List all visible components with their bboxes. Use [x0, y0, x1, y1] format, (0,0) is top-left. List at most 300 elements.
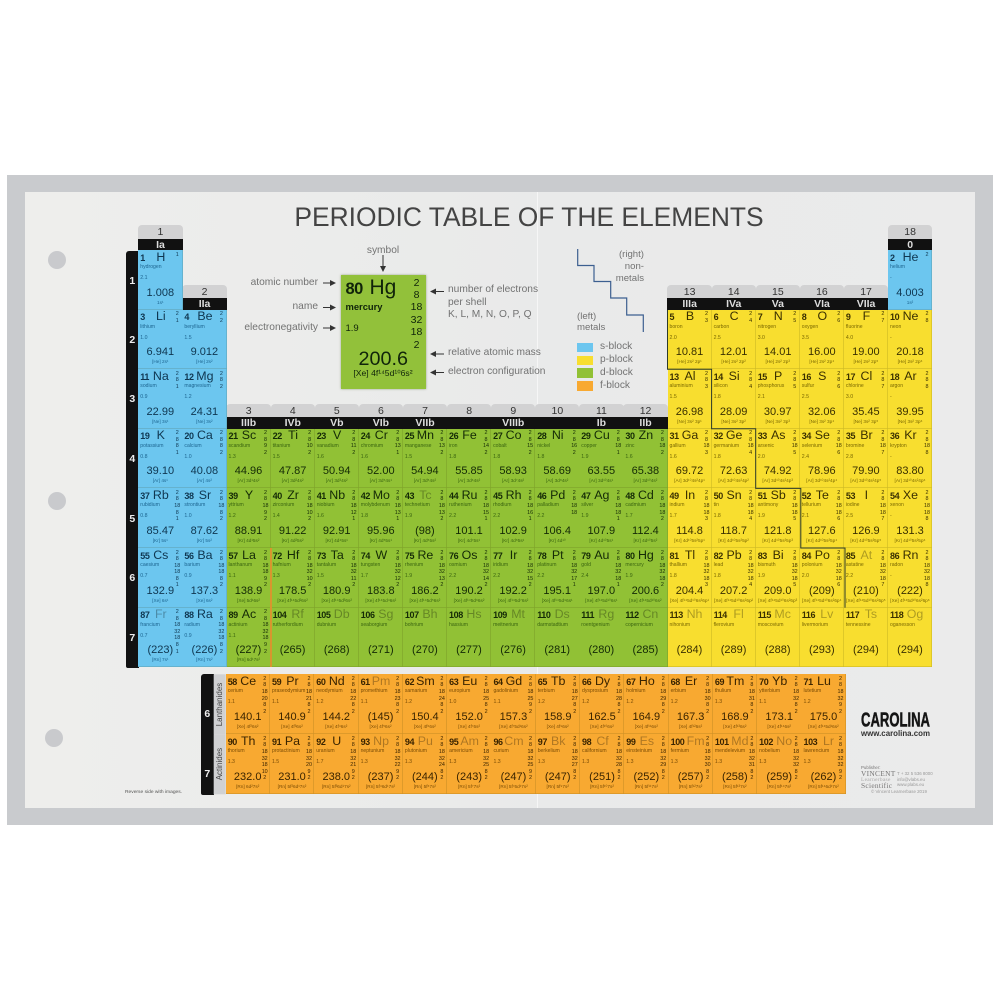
element: Xe: 8	[926, 496, 928, 502]
element: Ar: argon	[890, 383, 903, 389]
element: W: 2	[396, 550, 399, 556]
element: Md: (258)	[722, 771, 748, 783]
element: Be: beryllium	[184, 324, 205, 330]
element: Nd: 1.2	[316, 699, 323, 705]
element: Dy: 66	[582, 677, 591, 687]
element: W	[359, 548, 403, 608]
element: Kr: 8	[926, 450, 928, 456]
element: Th	[226, 734, 270, 794]
element: C	[712, 310, 756, 369]
element: Np: (237)	[368, 771, 393, 783]
label: left metals: (left)	[577, 311, 596, 322]
element: Re: 32	[439, 569, 445, 575]
element: Nb: 1	[352, 516, 355, 522]
element: He: helium	[890, 264, 905, 270]
publisher block: www.plabs.eu	[897, 782, 924, 787]
element: Cd: cadmium	[625, 502, 646, 508]
element: Bi: 1.9	[758, 573, 765, 579]
element: Lu: 8	[839, 682, 842, 688]
element: Am: 32	[483, 756, 489, 762]
element: Lr: (262)	[811, 771, 836, 783]
element: Lu: [Xe] 4f¹⁴5d¹6s²	[808, 724, 839, 729]
element: C: 2.5	[714, 335, 721, 341]
element: Fe: 55.85	[455, 465, 483, 477]
element: Ir: 32	[527, 569, 533, 575]
element: Ni	[535, 429, 580, 488]
element: Ba: 2	[220, 550, 223, 556]
element: Th: 8	[263, 742, 266, 748]
element: Co: 8	[529, 437, 532, 443]
element: Lr: 103	[803, 737, 817, 747]
element: La: 18	[262, 569, 268, 575]
element: Ca: 40.08	[191, 465, 218, 477]
element: Ts	[844, 608, 888, 667]
element: In: 8	[705, 496, 708, 502]
element: F	[844, 310, 888, 369]
element: Ce: cerium	[228, 688, 243, 694]
element: Pt: 18	[571, 563, 577, 569]
element: Pd: 18	[571, 503, 577, 509]
element: W: 74	[361, 550, 370, 560]
element: Hg: 18	[659, 563, 665, 569]
key element card: mercury: 18	[411, 326, 422, 338]
element: Cf: 32	[616, 756, 622, 762]
element: Np: 93	[361, 737, 370, 747]
element: K: [Ar] 4s¹	[153, 478, 168, 483]
element: Po: 32	[836, 569, 842, 575]
element: Bi: bismuth	[758, 562, 776, 568]
element: Am: 2	[485, 736, 488, 742]
element: Es: 18	[660, 749, 666, 755]
element: Er: 68	[671, 677, 680, 687]
element: Nb: 41	[317, 491, 326, 501]
element: Ru: 15	[483, 510, 489, 516]
element: Li: 1	[176, 318, 179, 324]
element: Cs: 132.9	[147, 584, 174, 596]
element: Rf: (265)	[280, 644, 305, 656]
element: Sc: [Ar] 3d¹4s²	[238, 478, 259, 483]
element: Rb: 18	[174, 503, 180, 509]
element: Y: 39	[228, 491, 238, 501]
element: Ag: [Kr] 4d¹⁰5s¹	[589, 538, 613, 543]
element: Ni: 28	[537, 431, 546, 441]
element: Th: 32	[262, 756, 268, 762]
element: As: [Ar] 3d¹⁰4s²4p³	[762, 478, 793, 483]
element: Tb: 2	[573, 676, 576, 682]
element: Lv: 116	[802, 610, 815, 620]
element: Cs: 8	[176, 576, 179, 582]
element: I: 8	[881, 496, 884, 502]
element: Cs: 55	[140, 550, 150, 560]
element: Pa: 32	[306, 756, 312, 762]
element: S	[800, 369, 844, 429]
element: In	[668, 488, 712, 548]
element: Rg: (280)	[588, 644, 614, 656]
element: H	[138, 250, 183, 310]
element: Hs: hassium	[449, 622, 468, 628]
element: Md: 31	[749, 762, 755, 768]
element: Ba	[182, 548, 227, 608]
element: La: 57	[228, 550, 238, 560]
element: Rb: 37	[140, 491, 150, 501]
element: Es: [Rn] 5f¹¹7s²	[635, 784, 658, 789]
element: Ag: 47	[581, 491, 591, 501]
element: Eu: europium	[449, 688, 470, 694]
element: Er: 8	[706, 702, 709, 708]
element: Fm: fermium	[671, 748, 689, 754]
element: O: 8	[802, 312, 806, 322]
element: Zn: 2	[661, 430, 664, 436]
element: U	[314, 734, 359, 794]
element: Pm: 18	[395, 689, 401, 695]
element: Os: 190.2	[455, 584, 483, 596]
element: Ho: 8	[662, 682, 665, 688]
period tab column	[201, 674, 214, 795]
element: Gd: 9	[529, 702, 532, 708]
element: Ac: 32	[262, 629, 268, 635]
element: Md: 1.3	[715, 759, 722, 765]
element: Ca: 8	[220, 443, 223, 449]
element: Sn: 118.7	[720, 525, 747, 537]
element: Br: 8	[881, 437, 884, 443]
element: Sb: 2	[793, 490, 796, 496]
element: Ir	[491, 548, 535, 608]
element: Zr: 40	[273, 491, 282, 501]
group headers: 14	[728, 286, 740, 298]
element: Sn: [Kr] 4d¹⁰5s²5p²	[718, 538, 749, 543]
element: Se: 8	[837, 437, 840, 443]
element: Ta: tantalum	[317, 562, 336, 568]
element: V: 11	[351, 443, 356, 449]
element: Ti: 2	[308, 430, 311, 436]
element: Fe: 8	[484, 437, 488, 443]
punched hole top	[48, 251, 66, 269]
element: N	[756, 310, 800, 369]
element: La: lanthanum	[228, 562, 252, 568]
element: Lv: livermorium	[802, 622, 828, 628]
element: Dy: 2	[618, 709, 621, 715]
element: Sb: 18	[792, 510, 798, 516]
element: Ir: 8	[529, 556, 532, 562]
element: Lu: 32	[837, 696, 843, 702]
element: Lr: [Rn] 5f¹⁴6d¹7s²	[808, 784, 839, 789]
element: Te: 127.6	[808, 525, 836, 537]
element: Te: 18	[836, 503, 842, 509]
element: Tb: 158.9	[544, 711, 571, 723]
element: Sb: 1.9	[758, 513, 765, 519]
element: Tl: 18	[704, 563, 710, 569]
element: Bi: 5	[793, 582, 796, 588]
element: Ne: 20.18	[896, 346, 924, 358]
element: Ge	[712, 429, 756, 488]
element: Rh: 45	[493, 491, 502, 501]
element: Cl: [Ne] 3s² 3p⁵	[853, 419, 878, 424]
grey backing board	[7, 175, 993, 825]
element: Cd: 48	[625, 491, 635, 501]
element: Ag: silver	[581, 502, 593, 508]
element: Ac	[226, 608, 271, 667]
key element card: mercury: 18	[411, 301, 422, 313]
element: Te: 2.1	[802, 513, 809, 519]
element: Hf: 2	[308, 550, 311, 556]
element: Ce: 140.1	[234, 711, 261, 723]
key label: atomic number: atomic number	[251, 277, 318, 288]
element: Ru: 8	[484, 496, 488, 502]
element: I: 7	[881, 516, 884, 522]
panel: lanthanides and actinides	[201, 674, 846, 795]
element: Sn: 50	[714, 491, 723, 501]
element: W: 1.7	[361, 573, 368, 579]
element: B: 2.0	[670, 335, 677, 341]
element: Rf: rutherfordium	[273, 622, 303, 628]
element: Ge: 72.63	[720, 465, 747, 477]
element: Bh: 107	[405, 610, 419, 620]
element: Pb: 2	[749, 550, 752, 556]
element: Pu: 2	[440, 775, 443, 781]
element: Am: 8	[485, 742, 488, 748]
element: Cu: 29	[581, 431, 591, 441]
group headers: 10	[551, 405, 563, 417]
element: Ar	[888, 369, 932, 429]
element: V: 8	[352, 437, 355, 443]
element: Th: 18	[262, 762, 268, 768]
element: Rn: 86	[890, 550, 899, 560]
group headers: 18	[904, 226, 916, 238]
element: Pa: 20	[306, 762, 312, 768]
element: P: 2.1	[758, 394, 765, 400]
element: In: 2	[705, 490, 708, 496]
element: Ra: 88	[184, 610, 194, 620]
element: S: 8	[837, 377, 840, 383]
element: N: 3.0	[758, 335, 765, 341]
element: Th: thorium	[228, 748, 245, 754]
element: K: 1	[176, 450, 179, 456]
element: Re: 18	[439, 563, 445, 569]
element: F: 2	[881, 311, 884, 317]
element: Th: 2	[263, 775, 266, 781]
element: Md: 8	[750, 742, 753, 748]
element: Zn: 1.6	[625, 454, 633, 460]
element: Db: (268)	[324, 644, 350, 656]
element: Ir: iridium	[493, 562, 508, 568]
element: Sm: 2	[440, 709, 443, 715]
element: Cm	[491, 734, 536, 794]
element: Tc: 1.9	[405, 513, 412, 519]
element: I: 2.5	[846, 513, 853, 519]
group headers: 2	[202, 286, 207, 298]
element: Ce: 58	[228, 677, 237, 687]
element: Re	[403, 548, 447, 608]
element: Pr	[270, 674, 314, 734]
element: Xe: 8	[926, 516, 928, 522]
legend text: p-block: p-block	[600, 354, 633, 365]
element: In: 18	[704, 510, 710, 516]
element: Cr	[359, 429, 403, 488]
element: Y: [Kr] 4d¹5s²	[238, 538, 259, 543]
element: Os: 2.2	[449, 573, 456, 579]
element: Cu: 2	[617, 430, 620, 436]
element: Ba: 8	[220, 576, 223, 582]
key element card: mercury: 8	[414, 289, 419, 301]
element: Pa: 2	[307, 736, 310, 742]
element: Sc: 8	[264, 437, 267, 443]
element: Nb: 12	[351, 510, 357, 516]
element: Ba: 18	[218, 569, 224, 575]
element: Li: [He] 2s¹	[152, 359, 168, 364]
element: Tc: 13	[439, 510, 445, 516]
element: Lr: 18	[837, 749, 843, 755]
group headers: 17	[860, 286, 872, 298]
element: Np: [Rn] 5f⁴6d¹7s²	[366, 784, 395, 789]
element: Os: 2	[484, 550, 488, 556]
element: Nh: 113	[670, 610, 683, 620]
element: Cm: 18	[527, 749, 533, 755]
element: Pd	[535, 488, 580, 548]
element: Kr: 18	[924, 443, 930, 449]
element: Mt: meitnerium	[493, 622, 518, 628]
element: F: [He] 2s² 2p⁵	[853, 359, 878, 364]
element: Cf: 8	[618, 742, 621, 748]
element: Tm	[713, 674, 757, 734]
element: H: hydrogen	[140, 264, 162, 270]
key label: number of electrons per shell: per shell	[448, 297, 487, 308]
element: Dy: [Xe] 4f¹⁰6s²	[590, 724, 614, 729]
element: Ds: 110	[537, 610, 551, 620]
legend swatch: d-block	[577, 368, 593, 378]
element: Co: 1.8	[493, 454, 500, 460]
element: Cd: 8	[661, 496, 664, 502]
element: Pm: 1.1	[361, 699, 368, 705]
element: Cm: 2	[529, 775, 532, 781]
element: Ce	[226, 674, 270, 734]
element: Te: tellurium	[802, 502, 821, 508]
element: Fe: [Ar] 3d⁶4s²	[458, 478, 480, 483]
key element card: mercury	[340, 275, 426, 389]
element: Zn	[623, 429, 668, 488]
element: Rn: 18	[924, 563, 930, 569]
element: Cn: 112	[625, 610, 639, 620]
element: Ac: [Rn] 6d¹7s²	[237, 657, 260, 662]
element: Y: 88.91	[235, 525, 262, 537]
element: He: -	[890, 275, 892, 281]
element: Rg	[579, 608, 624, 667]
element: Pr: praseodymium	[272, 688, 305, 694]
element: U: 2	[352, 736, 355, 742]
element: P	[756, 369, 800, 429]
element: Ar: 18	[890, 372, 899, 382]
element: Mo: 1.8	[361, 513, 368, 519]
element: Pd: 18	[571, 510, 577, 516]
element: Se: 6	[837, 450, 840, 456]
element: Es: 32	[660, 756, 666, 762]
element: Hf: 32	[307, 569, 313, 575]
element: Ra: 8	[220, 616, 223, 622]
element: La: 8	[264, 556, 267, 562]
element: Rb: 85.47	[147, 525, 174, 537]
element: Sm: 8	[440, 682, 443, 688]
element: C: 12.01	[720, 346, 747, 358]
element: Sm: 8	[440, 702, 443, 708]
element: Ca: 2	[220, 450, 223, 456]
element: Lr: 32	[837, 756, 843, 762]
element: Zr: 8	[308, 496, 311, 502]
element: Pb: 8	[749, 556, 752, 562]
element: Cl: 17	[846, 372, 855, 382]
element: Rn: 32	[924, 569, 930, 575]
element: Be: 9.012	[191, 346, 218, 358]
element: H: 1.008	[147, 286, 174, 298]
element: Mn: 8	[440, 437, 443, 443]
element: K: 2	[176, 430, 179, 436]
element: Gd: 25	[527, 696, 533, 702]
element: Os: 32	[483, 569, 489, 575]
element: Pu	[403, 734, 447, 794]
element: K: potassium	[140, 443, 164, 449]
element: Rn: 18	[924, 576, 930, 582]
element: W: 18	[395, 563, 401, 569]
element: Zn: [Ar] 3d¹⁰4s²	[634, 478, 657, 483]
key label: number of electrons per shell: number of electrons	[448, 284, 538, 295]
element: Y	[226, 488, 271, 548]
element: Se	[800, 429, 844, 488]
element: Lu: 9	[839, 702, 842, 708]
element: Pu: [Rn] 5f⁶7s²	[414, 784, 436, 789]
element: Nh: nihonium	[670, 622, 690, 628]
element: Eu: 8	[485, 682, 488, 688]
element: Pd: 106.4	[543, 525, 571, 537]
element: Ho: 1.2	[626, 699, 634, 705]
element: Al: [Ne] 3s² 3p¹	[677, 419, 702, 424]
element: Th: 90	[228, 737, 237, 747]
element: Sn: 18	[748, 503, 754, 509]
element: Co: 2	[529, 430, 532, 436]
element: Cd: 18	[659, 510, 665, 516]
element: W: 12	[395, 576, 401, 582]
element: Sm: 1.2	[405, 699, 412, 705]
element: Ts: 117	[846, 610, 859, 620]
element: Lr: 1.3	[803, 759, 811, 765]
element: Ta: 2	[352, 550, 355, 556]
element: Np: 8	[396, 742, 399, 748]
element: Np: 1.3	[361, 759, 368, 765]
element: V: 2	[352, 450, 355, 456]
element: Re: 2	[440, 550, 443, 556]
element: W: [Xe] 4f¹⁴5d⁴6s²	[365, 598, 396, 602]
element: V	[315, 429, 359, 488]
element: F: 9	[846, 312, 850, 322]
element: Pb: 18	[748, 576, 754, 582]
element: W: 183.8	[367, 584, 395, 596]
element: Eu: 2	[485, 709, 488, 715]
element: W: tungsten	[361, 562, 380, 568]
element: Bi: 18	[792, 563, 798, 569]
element: At: astatine	[846, 562, 864, 568]
element: Ts: tennessine	[846, 622, 871, 628]
element: Kr: 2	[926, 430, 928, 436]
element: Mn: manganese	[405, 443, 432, 449]
element: Co: [Ar] 3d⁷4s²	[502, 478, 524, 483]
element: Es: 1.3	[626, 759, 634, 765]
element: Rg: 111	[581, 610, 594, 620]
element: Pu: plutonium	[405, 748, 427, 754]
element: Ag: 18	[615, 510, 621, 516]
group headers: IIIb	[241, 417, 256, 429]
element: C: 2	[749, 311, 752, 317]
group headers: 8	[466, 405, 472, 417]
element: Ti: 1.5	[273, 454, 280, 460]
element: Th: 18	[262, 749, 268, 755]
element: Be: 2	[220, 311, 223, 317]
